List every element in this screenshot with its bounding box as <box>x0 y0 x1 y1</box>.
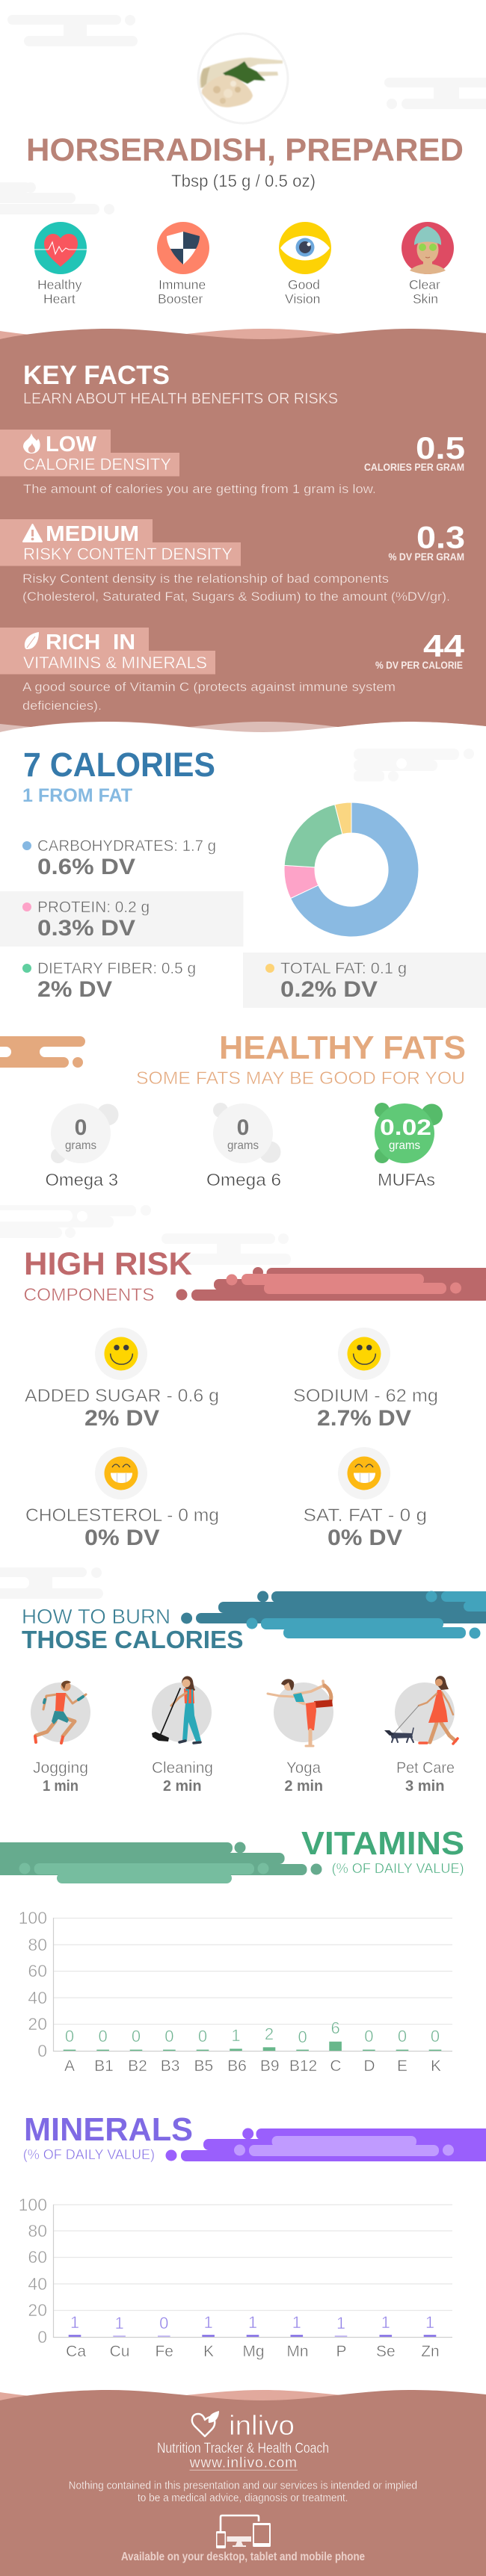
background cloud: burn <box>0 1567 103 1599</box>
bar chart: vitamins: 1 <box>231 2026 241 2045</box>
item: mufas <box>375 1103 443 1189</box>
description: deficiencies). <box>22 699 102 713</box>
website: www.inlivo.com <box>189 2455 297 2471</box>
item: carbohydrates: 0.6% DV <box>37 855 135 879</box>
bar chart: minerals: 1 <box>248 2313 257 2332</box>
icon: immune booster <box>157 222 209 274</box>
item: added sugar: ADDED SUGAR - 0.6 g <box>25 1386 219 1406</box>
bar chart: vitamins: 0 <box>132 2027 141 2046</box>
activity: cleaning: Cleaning <box>152 1759 213 1777</box>
item: saturated fat: SAT. FAT - 0 g <box>304 1505 427 1526</box>
bar chart: vitamins: 0 <box>298 2028 307 2046</box>
activity: yoga: Yoga <box>286 1759 321 1777</box>
label: immune booster: Immune <box>159 277 206 292</box>
bar chart: minerals: 0 <box>159 2314 168 2332</box>
unit: CALORIES PER GRAM <box>364 462 464 473</box>
activity: cleaning: 2 min <box>163 1778 202 1795</box>
label: good vision: Good <box>288 277 320 292</box>
bar chart: minerals: 1 <box>114 2314 124 2332</box>
bar chart: minerals: 0 <box>37 2327 47 2347</box>
bar chart: minerals: 1 <box>336 2314 345 2332</box>
icon: jogger <box>35 1681 86 1743</box>
icon: smiley <box>105 1337 138 1370</box>
bar chart: vitamins: B2 <box>128 2058 147 2075</box>
value: 44: 44 <box>423 628 465 663</box>
bar chart: vitamins: 80 <box>28 1935 47 1954</box>
item: omega 6: Omega 6 <box>206 1170 281 1189</box>
background clouds: header <box>0 15 486 214</box>
heading: minerals: MINERALS <box>24 2111 193 2148</box>
bar chart: vitamins: D <box>363 2058 375 2075</box>
availability note: Available on your desktop, tablet and mobile phone <box>121 2551 365 2563</box>
subheading: (% OF DAILY VALUE) <box>332 1860 464 1876</box>
tagline: Nutrition Tracker & Health Coach <box>157 2441 329 2456</box>
item: carbohydrates: CARBOHYDRATES: 1.7 g <box>37 837 216 855</box>
label: calorie density: CALORIE DENSITY <box>23 455 171 474</box>
item: dietary fiber <box>22 959 196 1002</box>
item: saturated fat: 0% DV <box>327 1526 402 1550</box>
bar chart: vitamins: 0 <box>98 2027 108 2046</box>
activity: pet care: Pet Care <box>396 1759 455 1777</box>
item: total fat: 0.2% DV <box>280 977 378 1002</box>
bar chart: minerals: 60 <box>28 2247 47 2267</box>
panel: healthy fats <box>0 1030 466 1189</box>
item: total fat <box>265 959 407 1002</box>
item: dietary fiber: DIETARY FIBER: 0.5 g <box>37 959 196 977</box>
heading: high risk: HIGH RISK <box>24 1246 192 1282</box>
bar chart: vitamins: B5 <box>194 2058 213 2075</box>
item: omega 6 <box>206 1103 281 1189</box>
title: HORSERADISH, PREPARED <box>26 132 464 168</box>
icon: dog walker <box>384 1676 458 1744</box>
value: 0.5: 0.5 <box>416 430 465 465</box>
description: Risky Content density is the relationship of bad components <box>22 572 389 586</box>
disclaimer: to be a medical advice, diagnosis or treatment. <box>138 2492 348 2504</box>
activity: yoga <box>268 1679 333 1795</box>
item: cholesterol <box>25 1447 219 1550</box>
fact: low calorie density <box>0 430 465 496</box>
unit: % DV PER GRAM <box>389 551 464 563</box>
logo: heart and leaf <box>192 2411 219 2436</box>
item: omega 3: grams <box>65 1139 96 1152</box>
food image: horseradish in ring <box>198 34 288 123</box>
item: mufas: grams <box>389 1139 420 1152</box>
item: sodium: SODIUM - 62 mg <box>293 1386 438 1406</box>
panel: footer <box>0 2390 486 2576</box>
bar chart: vitamins: B6 <box>227 2058 247 2075</box>
bar chart: vitamins: 40 <box>28 1988 47 2007</box>
bar chart: vitamins: 0 <box>164 2027 174 2046</box>
heading: healthy fats: HEALTHY FATS <box>219 1030 466 1066</box>
bar chart: minerals: 1 <box>203 2313 213 2332</box>
bar chart: minerals: 1 <box>425 2313 434 2332</box>
icon: devices <box>216 2515 271 2548</box>
bar chart: minerals: P <box>336 2343 347 2360</box>
item: protein: PROTEIN: 0.2 g <box>37 898 150 916</box>
label: vitamins and minerals: VITAMINS & MINERALS <box>23 653 207 672</box>
description: The amount of calories you are getting from 1 gram is low. <box>23 482 376 496</box>
label: healthy heart: Heart <box>43 291 76 306</box>
brand name: inlivo <box>229 2410 295 2441</box>
activity: yoga: 2 min <box>284 1778 323 1795</box>
bar chart: vitamins: 0 <box>364 2027 374 2046</box>
bar chart: minerals: K <box>203 2343 214 2360</box>
bar chart: minerals: 40 <box>28 2274 47 2294</box>
item: omega 6: grams <box>227 1139 259 1152</box>
level: low: LOW <box>46 433 96 456</box>
subheading: (% OF DAILY VALUE) <box>23 2146 155 2162</box>
bar chart: minerals <box>19 2195 452 2360</box>
item: protein: 0.3% DV <box>37 916 135 941</box>
bar chart: minerals: 1 <box>381 2313 390 2332</box>
item: dietary fiber: 2% DV <box>37 977 112 1002</box>
panel: key facts <box>0 329 486 732</box>
bar chart: vitamins: 20 <box>28 2014 47 2034</box>
bar chart: vitamins <box>19 1908 452 2075</box>
decoration band: green <box>0 1842 322 1883</box>
heading: 7 calories: 7 CALORIES <box>23 746 215 784</box>
icon: grin <box>105 1457 138 1490</box>
icon: warning triangle <box>23 524 42 542</box>
bar chart: vitamins: B9 <box>260 2058 280 2075</box>
bar chart: vitamins: E <box>397 2058 407 2075</box>
bar chart: minerals: Mn <box>286 2343 309 2360</box>
unit: % DV PER CALORIE <box>375 660 463 671</box>
icon: clear skin <box>402 222 454 274</box>
bar chart: vitamins: B1 <box>94 2058 114 2075</box>
bar chart: minerals: 100 <box>19 2195 47 2214</box>
bar chart: minerals: 1 <box>70 2313 79 2332</box>
background clouds: high risk <box>0 1205 291 1265</box>
label: healthy heart: Healthy <box>37 277 82 292</box>
activity: jogging: 1 min <box>43 1778 79 1795</box>
bar chart: vitamins: C <box>330 2058 342 2075</box>
background cloud: calories <box>354 749 474 781</box>
item: sodium <box>293 1328 438 1431</box>
decoration band: red <box>176 1267 486 1301</box>
bar chart: minerals: 1 <box>292 2313 301 2332</box>
panel: high risk <box>24 1246 486 1550</box>
heading: vitamins: VITAMINS <box>301 1825 464 1862</box>
item: omega 3: 0 <box>75 1115 87 1140</box>
level: rich in: RICH IN <box>46 631 135 654</box>
bar chart: vitamins: 0 <box>431 2027 440 2046</box>
donut chart <box>284 802 419 937</box>
bar chart: vitamins: 0 <box>398 2027 407 2046</box>
item: mufas: MUFAs <box>378 1170 435 1189</box>
bar chart: vitamins: 100 <box>19 1908 47 1928</box>
bar chart: vitamins: 0 <box>65 2027 74 2046</box>
description: A good source of Vitamin C (protects against immune system <box>22 680 396 694</box>
disclaimer: Nothing contained in this presentation and our services is intended or implied <box>69 2480 417 2492</box>
level: medium: MEDIUM <box>46 522 139 546</box>
icon: cleaner <box>152 1676 201 1743</box>
serving size: Tbsp (15 g / 0.5 oz) <box>171 171 316 191</box>
bar chart: vitamins: B3 <box>161 2058 179 2075</box>
bar chart: minerals: Fe <box>155 2343 173 2360</box>
icon: smiley <box>347 1337 381 1370</box>
panel: minerals <box>19 2111 486 2360</box>
item: carbohydrates <box>22 837 216 879</box>
activity: pet care: 3 min <box>405 1778 444 1795</box>
bar chart: vitamins: K <box>431 2058 441 2075</box>
decoration band: teal <box>181 1591 486 1639</box>
label: immune booster: Booster <box>158 291 203 306</box>
panel: calories <box>0 746 486 1008</box>
icon: healthy heart <box>34 222 87 274</box>
subheading: from fat: 1 FROM FAT <box>22 785 132 806</box>
icon: leaf <box>25 632 39 649</box>
item: cholesterol: CHOLESTEROL - 0 mg <box>25 1505 219 1526</box>
item: protein <box>22 898 150 941</box>
subheading: SOME FATS MAY BE GOOD FOR YOU <box>136 1068 465 1089</box>
bar chart: minerals: Zn <box>421 2343 440 2360</box>
benefits row <box>34 222 454 306</box>
bar chart: minerals: Se <box>376 2343 396 2360</box>
item: omega 3: Omega 3 <box>45 1170 118 1189</box>
activity: jogging: Jogging <box>33 1759 88 1777</box>
label: clear skin: Clear <box>409 277 440 292</box>
panel: how to burn <box>22 1591 486 1795</box>
item: added sugar: 2% DV <box>84 1406 159 1431</box>
activity: pet care <box>384 1676 458 1795</box>
fact: medium risky content density <box>0 519 465 604</box>
activity: jogging <box>31 1681 90 1795</box>
bar chart: vitamins: 6 <box>330 2019 340 2037</box>
icon: flame <box>23 433 40 453</box>
item: cholesterol: 0% DV <box>84 1526 160 1550</box>
heading: how to burn: HOW TO BURN <box>22 1605 170 1628</box>
item: sodium: 2.7% DV <box>317 1406 411 1431</box>
heading: key facts: KEY FACTS <box>23 361 170 390</box>
item: omega 3 <box>45 1103 118 1189</box>
bar chart: vitamins: 0 <box>198 2027 207 2046</box>
bar chart: minerals: Cu <box>110 2343 129 2360</box>
label: clear skin: Skin <box>413 291 438 306</box>
panel: vitamins <box>0 1825 464 2075</box>
heading: those calories: THOSE CALORIES <box>22 1626 244 1654</box>
item: added sugar <box>25 1328 219 1431</box>
icon: yoga pose <box>268 1679 333 1746</box>
bar chart: minerals: 80 <box>28 2221 47 2241</box>
bar chart: vitamins: 60 <box>28 1961 47 1981</box>
icon: grin <box>347 1457 381 1490</box>
bar chart: vitamins: 0 <box>37 2041 47 2061</box>
subheading: components: COMPONENTS <box>24 1285 154 1305</box>
decoration band: purple <box>166 2128 486 2161</box>
bar chart: vitamins: A <box>64 2058 75 2075</box>
subheading: LEARN ABOUT HEALTH BENEFITS OR RISKS <box>23 391 338 407</box>
bar chart: minerals: Ca <box>66 2343 86 2360</box>
fact: rich in vitamins and minerals <box>0 628 465 713</box>
label: risky content density: RISKY CONTENT DENSITY <box>23 545 233 563</box>
bar chart: vitamins: 2 <box>265 2025 274 2043</box>
bar chart: minerals: Mg <box>242 2343 265 2360</box>
description: (Cholesterol, Saturated Fat, Sugars & Sodium) to the amount (%DV/gr). <box>22 589 450 604</box>
icon: good vision <box>279 222 331 274</box>
decoration band: orange <box>0 1036 85 1068</box>
item: mufas: 0.02 <box>380 1115 431 1140</box>
item: total fat: TOTAL FAT: 0.1 g <box>280 959 407 977</box>
activity: cleaning <box>152 1676 213 1795</box>
bar chart: vitamins: B12 <box>289 2058 317 2075</box>
item: omega 6: 0 <box>237 1115 249 1140</box>
item: saturated fat <box>304 1447 427 1550</box>
value: 0.3: 0.3 <box>416 520 465 554</box>
bar chart: minerals: 20 <box>28 2300 47 2320</box>
label: good vision: Vision <box>285 291 320 306</box>
